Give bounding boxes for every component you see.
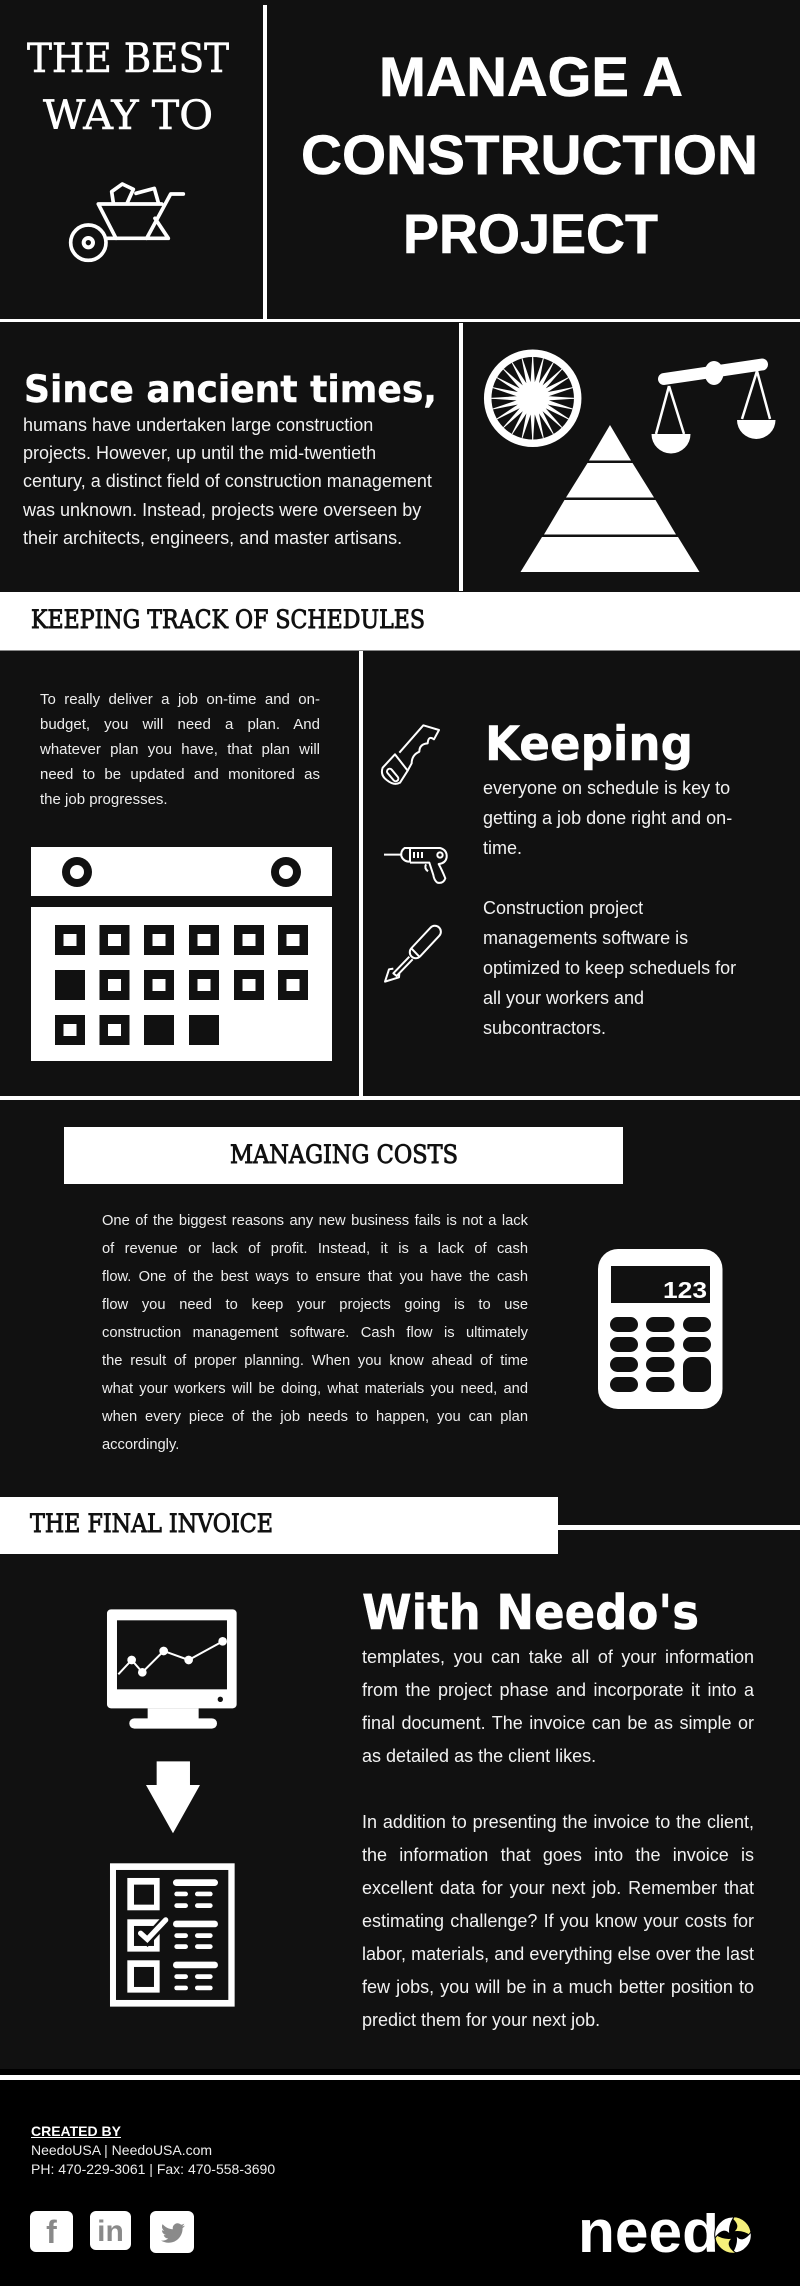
text: invoice body: few jobs, you will be in a much better position to: [362, 1976, 754, 1996]
icon: checklist: [110, 1863, 235, 2007]
title: manage a construction project: MANAGE A: [379, 45, 683, 108]
text: invoice body: from the project phase and incorporate it into a: [362, 1680, 754, 1700]
text: since ancient times body: [23, 415, 432, 548]
text: created by contact: CREATED BY: [31, 2123, 121, 2139]
text: managing costs body: the result of proper planning. When you know ahead of time: [102, 1353, 528, 1369]
text: schedule plan: To really deliver a job on-time and on-: [40, 691, 320, 708]
text: invoice body: In addition to presenting the invoice to the client,: [362, 1812, 754, 1832]
panel: managing costs: [64, 1127, 722, 1453]
text: since ancient times body: humans have undertaken large construction: [23, 415, 373, 435]
icon: down arrow: [146, 1761, 200, 1833]
text: keeping body: all your workers and: [483, 988, 644, 1008]
text: managing costs body: One of the biggest reasons any new business fails is not a lack: [102, 1213, 528, 1229]
icon: linkedin: [90, 2211, 131, 2250]
text: since ancient times body: their architects, engineers, and master artisans.: [23, 528, 402, 548]
footer: [0, 2069, 800, 2286]
banner: the final invoice: [0, 1497, 800, 1554]
icon: drill: [384, 848, 447, 883]
text: schedule plan: the job progresses.: [40, 791, 168, 808]
heading: keeping: Keeping: [485, 717, 693, 772]
text: managing costs body: flow you need to keep your projects going is to use: [102, 1297, 528, 1313]
icon: calculator: 123: [663, 1277, 707, 1303]
text: schedule plan: whatever plan you have, that plan will: [40, 741, 320, 758]
text: managing costs body: flow. One of the best ways to ensure that you have the cash: [102, 1269, 528, 1285]
text: managing costs body: of revenue or lack of profit. Instead, it is a lack of cash: [102, 1241, 528, 1257]
text: invoice body: templates, you can take all of your information: [362, 1646, 754, 1666]
text: keeping body: getting a job done right and on-: [483, 808, 732, 828]
subtitle: the best way to: THE BEST: [27, 36, 229, 82]
heading: since ancient times: Since ancient times,: [24, 368, 437, 411]
text: since ancient times body: projects. However, up until the mid-twentieth: [23, 443, 376, 463]
text: since ancient times body: century, a distinct field of construction management: [23, 471, 432, 491]
text: invoice body: the information that goes into the invoice is: [362, 1844, 754, 1864]
text: managing costs body: when every piece of the job needs to happen, you can plan: [102, 1409, 528, 1425]
logo: needo: [582, 2213, 751, 2253]
text: keeping body: time.: [483, 838, 522, 858]
icon: screwdriver: [385, 923, 443, 982]
text: managing costs body: what your workers will be doing, what materials you need, and: [102, 1381, 528, 1397]
text: invoice body: [362, 1646, 754, 2030]
text: invoice body: final document. The invoice can be as simple or: [362, 1712, 754, 1732]
text: schedule plan: budget, you will need a plan. And: [40, 716, 320, 733]
icon: wheelbarrow: [71, 184, 183, 260]
text: created by contact: [31, 2123, 275, 2177]
icon: twitter: [150, 2211, 194, 2253]
text: invoice body: predict them for your next job.: [362, 2010, 600, 2030]
banner: the final invoice: THE FINAL INVOICE: [30, 1509, 273, 1538]
text: invoice body: labor, materials, and everything else over the last: [362, 1944, 754, 1964]
text: keeping body: everyone on schedule is key to: [483, 778, 730, 798]
text: managing costs body: [102, 1213, 528, 1453]
icon: wheel: [488, 353, 578, 443]
text: schedule plan: [40, 691, 320, 808]
icon: balance scale: [652, 361, 776, 454]
title: manage a construction project: PROJECT: [403, 202, 658, 265]
text: since ancient times body: was unknown. Instead, projects were overseen by: [23, 500, 421, 520]
text: created by contact: NeedoUSA | NeedoUSA.com: [31, 2142, 212, 2158]
subtitle: the best way to: [27, 36, 229, 139]
logo: needo: need: [578, 2198, 719, 2265]
title: manage a construction project: [301, 45, 758, 265]
title: manage a construction project: CONSTRUCTION: [301, 123, 758, 186]
text: keeping body: [483, 778, 736, 1038]
text: keeping body: optimized to keep scheduels for: [483, 958, 736, 978]
icon: facebook: [30, 2211, 73, 2252]
icon: facebook: f: [46, 2214, 57, 2250]
panel: schedules: [0, 651, 800, 1100]
text: schedule plan: need to be updated and monitored as: [40, 766, 320, 783]
heading: managing costs: [64, 1127, 623, 1184]
heading: managing costs: MANAGING COSTS: [230, 1140, 458, 1169]
banner: keeping track of schedules: KEEPING TRACK OF SCHEDULES: [31, 605, 425, 634]
panel: final invoice: [107, 1585, 754, 2030]
icon: pyramid: [520, 425, 700, 572]
text: invoice body: excellent data for your next job. Remember that: [362, 1878, 754, 1898]
banner: keeping track of schedules: [0, 592, 800, 651]
icon: calendar: [31, 847, 332, 1061]
icon: monitor with chart: [107, 1609, 237, 1729]
icon: saw: [382, 725, 439, 784]
text: keeping body: subcontractors.: [483, 1018, 606, 1038]
text: invoice body: as detailed as the client likes.: [362, 1746, 596, 1766]
text: managing costs body: accordingly.: [102, 1437, 179, 1453]
panel: since ancient times: [23, 323, 776, 591]
text: keeping body: Construction project: [483, 898, 643, 918]
heading: with needo's: With Needo's: [362, 1585, 699, 1641]
panel: header: [0, 5, 800, 322]
text: invoice body: estimating challenge? If you know your costs for: [362, 1910, 754, 1930]
icon: linkedin: in: [97, 2215, 124, 2248]
text: keeping body: managements software is: [483, 928, 688, 948]
icon: calculator: [598, 1249, 722, 1409]
subtitle: the best way to: WAY TO: [43, 93, 213, 139]
text: managing costs body: construction management software. Cash flow is ultimately: [102, 1325, 528, 1341]
text: created by contact: PH: 470-229-3061 | Fax: 470-558-3690: [31, 2161, 275, 2177]
